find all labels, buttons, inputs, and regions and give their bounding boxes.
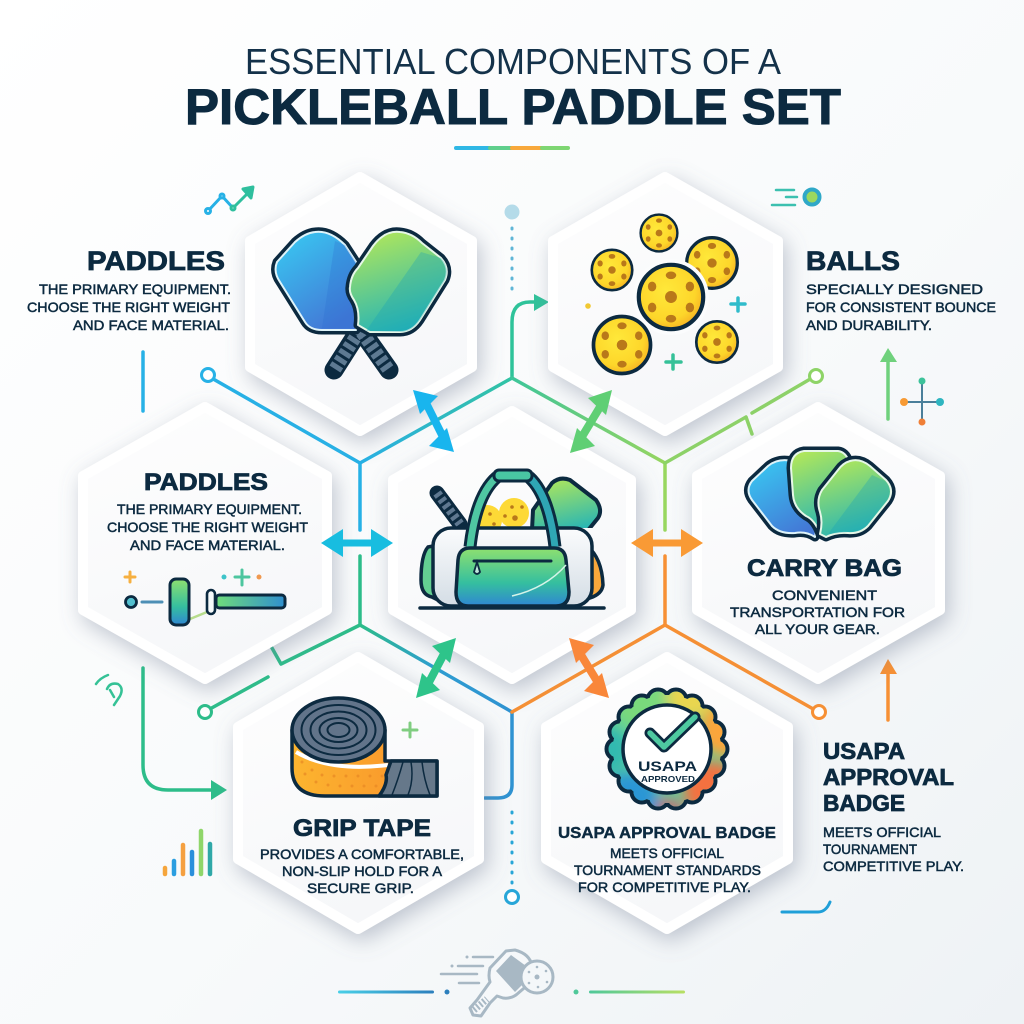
panel: middle-right hexagon	[697, 407, 940, 679]
icon: USAPA approved badge: USAPA	[638, 758, 697, 774]
text block: carry bag: TRANSPORTATION FOR	[730, 604, 905, 620]
text block: balls: BALLS	[806, 246, 900, 276]
panel: top-right hexagon	[553, 177, 778, 431]
decoration: mini bar chart	[165, 831, 210, 874]
title underline	[456, 146, 568, 150]
text block: usapa badge right side: USAPA	[823, 738, 905, 764]
panel: bottom-right hexagon	[546, 657, 788, 929]
double arrow: grip tape to bag	[416, 638, 456, 698]
text block: paddles middle left	[107, 469, 308, 553]
text block: balls: AND DURABILITY.	[806, 317, 932, 333]
text block: carry bag: CARRY BAG	[747, 555, 902, 582]
double arrow: adjustment to bag	[321, 529, 393, 557]
title	[185, 41, 841, 135]
decoration: swirl	[96, 675, 122, 705]
double arrow: balls to bag	[570, 390, 612, 453]
text block: usapa badge right side: COMPETITIVE PLAY.	[823, 858, 964, 874]
double arrow: badge to bag	[569, 638, 609, 698]
arrowheads on outer connectors	[211, 294, 897, 800]
text block: usapa badge right side: APPROVAL	[823, 764, 954, 790]
text block: usapa badge right side: BADGE	[823, 790, 905, 816]
icon: carry bag with gear	[420, 470, 604, 608]
text block: usapa badge inside hexagon: USAPA APPROVAL BADGE	[558, 825, 776, 842]
double arrow: carry bag to bag	[631, 529, 703, 557]
text block: balls: SPECIALLY DESIGNED	[806, 281, 983, 297]
text block: grip tape: SECURE GRIP.	[307, 880, 414, 896]
icon: USAPA approved badge: APPROVED	[641, 774, 695, 784]
decoration: trend arrow	[206, 187, 253, 214]
text block: grip tape	[260, 815, 464, 896]
text block: paddles top left	[27, 246, 231, 333]
text block: usapa badge right side: TOURNAMENT	[823, 841, 917, 857]
double arrow: paddles to bag	[413, 390, 454, 452]
text block: paddles top left: AND FACE MATERIAL.	[73, 317, 229, 333]
text block: balls	[806, 246, 996, 333]
icon: crossed paddles	[276, 232, 447, 370]
panel: top-left hexagon	[250, 177, 472, 431]
text block: balls: FOR CONSISTENT BOUNCE	[806, 299, 996, 315]
text block: paddles middle left: AND FACE MATERIAL.	[130, 537, 285, 553]
text block: usapa badge inside hexagon	[558, 825, 776, 895]
text block: grip tape: PROVIDES A COMFORTABLE,	[260, 846, 464, 862]
text block: paddles top left: CHOOSE THE RIGHT WEIGHT	[27, 299, 230, 315]
footer divider right	[574, 990, 685, 994]
decoration: speed lines and ball	[772, 190, 820, 205]
text block: paddles middle left: THE PRIMARY EQUIPMENT.	[117, 501, 302, 517]
panel: bottom-left hexagon	[238, 657, 479, 929]
icon: adjustment roller	[125, 570, 285, 625]
text block: carry bag	[730, 555, 905, 637]
text block: usapa badge inside hexagon: TOURNAMENT STANDARDS	[574, 862, 761, 878]
text block: grip tape: NON-SLIP HOLD FOR A	[282, 863, 443, 879]
text block: paddles top left: THE PRIMARY EQUIPMENT.	[39, 281, 231, 297]
panel: middle-left hexagon	[83, 407, 327, 679]
connector lines	[143, 302, 888, 798]
decoration: crosshair dots	[900, 378, 944, 426]
icon: grip tape roll	[292, 698, 437, 796]
title: ESSENTIAL COMPONENTS OF A	[245, 41, 781, 82]
panel: centre hexagon	[393, 411, 631, 679]
dotted connectors	[510, 228, 514, 884]
text block: grip tape: GRIP TAPE	[293, 815, 431, 842]
connector end nodes	[198, 204, 826, 904]
text block: usapa badge right side	[823, 738, 964, 874]
text block: usapa badge right side: MEETS OFFICIAL	[823, 824, 941, 840]
icon: pickleballs	[585, 215, 745, 374]
icon: footer paddle and ball	[441, 950, 553, 1016]
text block: paddles middle left: PADDLES	[144, 469, 268, 496]
footer divider left	[338, 990, 450, 994]
text block: usapa badge inside hexagon: MEETS OFFICIAL	[610, 845, 724, 861]
title: PICKLEBALL PADDLE SET	[185, 79, 841, 135]
text block: carry bag: CONVENIENT	[772, 587, 878, 603]
icon: three paddles	[748, 451, 891, 537]
decoration: corner line	[782, 902, 830, 912]
text block: usapa badge inside hexagon: FOR COMPETITIVE PLAY.	[578, 879, 751, 895]
text block: paddles top left: PADDLES	[87, 246, 225, 276]
text block: carry bag: ALL YOUR GEAR.	[755, 621, 880, 637]
icon: USAPA approved badge	[604, 688, 730, 810]
text block: paddles middle left: CHOOSE THE RIGHT WEIGHT	[107, 519, 308, 535]
